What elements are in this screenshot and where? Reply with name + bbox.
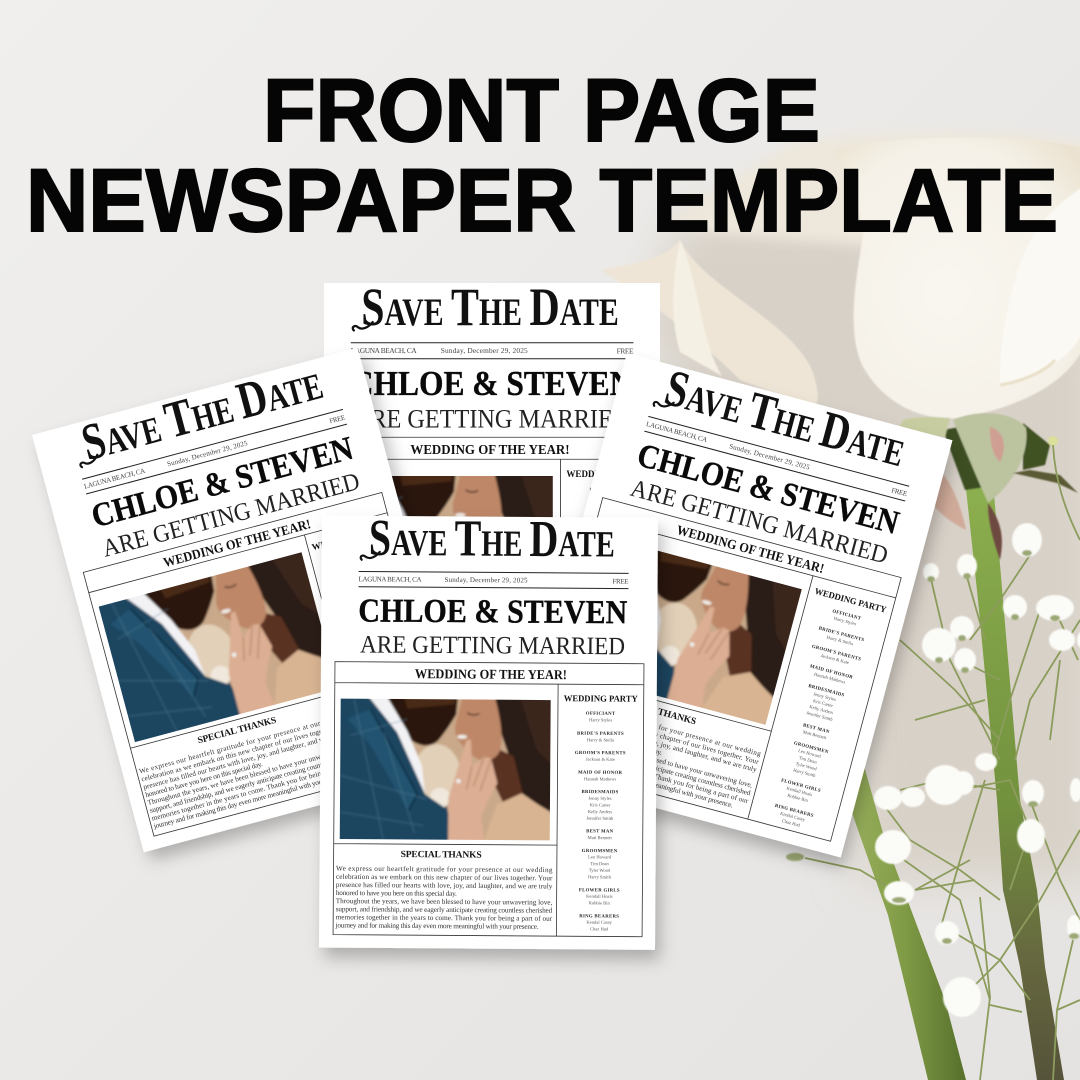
special thanks: [335, 850, 553, 931]
wedding party column: Tyler Wood: [795, 761, 818, 772]
card content: CHLOE & STEVEN: [351, 364, 632, 403]
wedding party column: Kendall Hoals: [586, 894, 613, 899]
couple photo: [95, 548, 342, 746]
special thanks: SPECIAL THANKS: [616, 697, 697, 727]
wedding party column: Chaz Hud: [590, 926, 609, 932]
couple photo: [336, 695, 554, 844]
special thanks: presence has filled our hearts with love, joy, and laughter, and we are truly: [142, 727, 354, 791]
wedding party column: BRIDE'S PARENTS: [577, 732, 624, 737]
special thanks: support, and friendship, and we eagerly anticipate creating countless cherished: [149, 751, 360, 815]
special thanks: celebration as we embark on this new chapter of our lives together. Your: [548, 702, 760, 766]
wedding party column: Kris Carter: [590, 802, 611, 808]
wedding party column: BEST MAN: [802, 723, 830, 735]
wedding party column: Robbie Bin: [589, 900, 611, 906]
wedding party column: GROOMSMEN: [582, 849, 618, 854]
banner: WEDDING OF THE YEAR!: [415, 666, 567, 682]
wedding party column: Hannah Mathews: [584, 776, 617, 782]
baby's breath flowers: [786, 523, 1080, 1017]
wedding party column: MAID OF HONOR: [578, 771, 623, 776]
card content: LAGUNA BEACH, CA: [351, 346, 417, 355]
wedding party column: Tim Dean: [590, 861, 609, 866]
calyx: [898, 413, 1078, 560]
wedding party column: Kendal Casey: [586, 920, 613, 925]
title line 2: NEWSPAPER TEMPLATE: [26, 150, 1058, 250]
card content: Sunday, December 29, 2025: [441, 346, 528, 355]
wedding party column: Kris Carter: [812, 698, 834, 708]
subheadline: ARE GETTING MARRIED: [628, 475, 891, 570]
subheadline: ARE GETTING MARRIED: [100, 468, 363, 563]
date bar: Sunday, December 29, 2025: [445, 576, 528, 584]
card paper: [515, 353, 953, 858]
newspaper card: back centre: [324, 283, 660, 518]
wedding party column: Tyler Wood: [589, 868, 611, 873]
stem 1: [964, 470, 1064, 1080]
wedding party column: Harry Smith: [793, 767, 817, 778]
wedding party column: WEDDING PARTY: [814, 586, 888, 615]
baby's breath stems: [805, 445, 1080, 1080]
special thanks: support, and friendship, and we eagerly anticipate creating countless cherished: [336, 905, 553, 915]
date bar: LAGUNA BEACH, CA: [83, 467, 146, 491]
wedding party column: OFFICIANT: [586, 712, 616, 717]
wedding party column: [562, 693, 638, 932]
special thanks: memories together in the years to come. Thank you for being a part of our: [336, 913, 553, 923]
special thanks: presence has filled our hearts with love, joy, and laughter, and we are truly: [336, 881, 553, 890]
date bar: FREE: [329, 413, 346, 425]
newspaper card: front centre: [319, 510, 658, 950]
special thanks: honored to have you here on this special day.: [336, 889, 457, 898]
rose bud: [835, 137, 1080, 419]
wedding party column: GROOM'S PARENTS: [811, 645, 862, 663]
outer petals: [660, 132, 1080, 245]
headline: CHLOE & STEVEN: [358, 592, 627, 631]
masthead: SAVE THE DATE: [659, 359, 912, 478]
title line 1: FRONT PAGE: [263, 60, 820, 160]
banner: WEDDING OF THE YEAR!: [675, 522, 826, 576]
wedding party column: Leo Howard: [588, 854, 612, 860]
date bar: [82, 409, 347, 494]
special thanks: support, and friendship, and we eagerly anticipate creating countless cherished: [540, 734, 752, 797]
card paper: [32, 348, 469, 852]
wedding party column: RING BEARERS: [579, 914, 619, 920]
special thanks: presence has filled our hearts with love, joy, and laughter, and we are truly: [546, 710, 758, 774]
couple photo: [559, 531, 806, 729]
card content: FREE: [617, 347, 634, 356]
wedding party column: Jenny Styles: [588, 796, 612, 801]
date bar: [359, 571, 629, 589]
masthead: SAVE THE DATE: [76, 353, 328, 472]
wedding party column: Jennifer Smith: [586, 816, 614, 821]
wedding party column: FLOWER GIRLS: [780, 779, 821, 794]
special thanks: Throughout the years, we have been blessed to have your unwavering love,: [542, 726, 754, 790]
date bar: Sunday, December 29, 2025: [728, 442, 811, 472]
wedding party column: Jennifer Smith: [806, 710, 834, 722]
wedding party column: RING BEARERS: [774, 804, 814, 819]
title: [26, 60, 1058, 250]
wedding party column: BEST MAN: [586, 829, 614, 835]
wedding party column: Kendall Hoals: [786, 786, 813, 797]
subheadline: ARE GETTING MARRIED: [360, 631, 625, 660]
special thanks: honored to have you here on this special day.: [544, 718, 663, 757]
special thanks: [535, 680, 766, 813]
special thanks: We express our heartfelt gratitude for your presence at our wedding: [336, 865, 553, 874]
card content: ARE GETTING MARRIED: [353, 405, 630, 434]
special thanks: We express our heartfelt gratitude for your presence at our wedding: [551, 694, 762, 758]
wedding party column: Harry & Stella: [587, 737, 614, 743]
special thanks: Throughout the years, we have been blessed to have your unwavering love,: [147, 743, 358, 807]
special thanks: SPECIAL THANKS: [401, 850, 482, 861]
wedding party column: BRIDESMAIDS: [581, 790, 619, 795]
special thanks: memories together in the years to come. Thank you for being a part of our: [151, 759, 363, 823]
newspaper card: right tilted: [515, 347, 954, 858]
date bar: FREE: [890, 486, 908, 498]
newspaper card: left tilted: [30, 342, 469, 852]
wedding party column: [755, 586, 888, 835]
date bar: Sunday, December 29, 2025: [166, 439, 249, 468]
wedding party column: Kendal Casey: [780, 811, 806, 822]
wedding party column: Jenny Styles: [813, 691, 837, 702]
wedding party column: GROOM'S PARENTS: [575, 751, 626, 756]
wedding party column: Harry & Stella: [826, 634, 854, 646]
soft backdrop behind the rose: [640, 215, 1080, 880]
wedding party column: MAID OF HONOR: [809, 664, 853, 681]
special thanks: memories together in the years to come. Thank you for being a part of our: [538, 741, 750, 805]
card content: [350, 289, 634, 518]
card content: WEDDING PARTY: [566, 470, 644, 480]
wedding party column: Harry Styles: [833, 616, 857, 627]
special thanks: We express our heartfelt gratitude for your presence at our wedding: [138, 712, 350, 776]
wedding party column: WEDDING PARTY: [564, 693, 638, 704]
special thanks: [133, 697, 365, 831]
card content: WEDDING OF THE YEAR!: [410, 442, 570, 458]
special thanks: celebration as we embark on this new chapter of our lives together. Your: [336, 873, 553, 882]
card paper: [324, 283, 660, 543]
headline: CHLOE & STEVEN: [88, 430, 357, 535]
box rules: [532, 498, 901, 841]
date bar: FREE: [613, 578, 629, 586]
wedding party column: Harry Styles: [589, 717, 612, 723]
wedding party column: Matt Bennett: [802, 729, 828, 740]
wedding party column: Jackson & Kate: [820, 653, 850, 665]
card content: OFFICIANT: [590, 488, 621, 493]
wedding party column: FLOWER GIRLS: [579, 888, 620, 894]
wedding party column: GROOMSMEN: [793, 741, 829, 755]
date bar: LAGUNA BEACH, CA: [359, 575, 422, 584]
masthead: SAVE THE DATE: [369, 510, 615, 569]
special thanks: SPECIAL THANKS: [197, 716, 278, 746]
wedding party column: Matt Bennett: [588, 835, 613, 840]
special thanks: journey and for making this day even more meaningful with your presence.: [535, 749, 734, 810]
special thanks: celebration as we embark on this new chapter of our lives together. Your: [140, 720, 352, 783]
wedding party column: Robbie Bin: [787, 793, 809, 803]
special thanks: honored to have you here on this special day.: [145, 760, 264, 799]
wedding party column: Chaz Hud: [781, 818, 801, 828]
special thanks: journey and for making this day even more meaningful with your presence.: [152, 770, 351, 831]
stem 2: [832, 745, 966, 1080]
wedding party column: Kelly Anders: [809, 704, 834, 715]
wedding party column: Leo Howard: [798, 748, 822, 759]
date bar: LAGUNA BEACH, CA: [645, 420, 708, 444]
rose and flowers background photo: [600, 132, 1080, 1080]
special thanks: Throughout the years, we have been blessed to have your unwavering love,: [336, 897, 553, 907]
wedding party column: BRIDE'S PARENTS: [818, 626, 865, 643]
card paper: [319, 516, 658, 950]
wedding party column: Jackson & Kate: [586, 757, 615, 762]
date bar: [644, 416, 909, 501]
wedding party column: Kelly Anders: [588, 809, 612, 814]
wedding party heading: WEDDING PARTY: [311, 522, 388, 552]
box rules: [333, 662, 644, 937]
wedding party column: Hannah Mathews: [814, 671, 846, 685]
wedding party column: Harry Smith: [588, 874, 612, 880]
banner: WEDDING OF THE YEAR!: [162, 516, 312, 570]
wedding party column: Tim Dean: [798, 755, 818, 765]
wedding party column: BRIDESMAIDS: [808, 684, 845, 699]
wedding party column: OFFICIANT: [832, 609, 862, 622]
card content: SAVE THE DATE: [361, 276, 619, 337]
special thanks: journey and for making this day even more meaningful with your presence.: [335, 921, 539, 931]
headline: CHLOE & STEVEN: [633, 437, 903, 542]
box rules: [83, 492, 452, 836]
